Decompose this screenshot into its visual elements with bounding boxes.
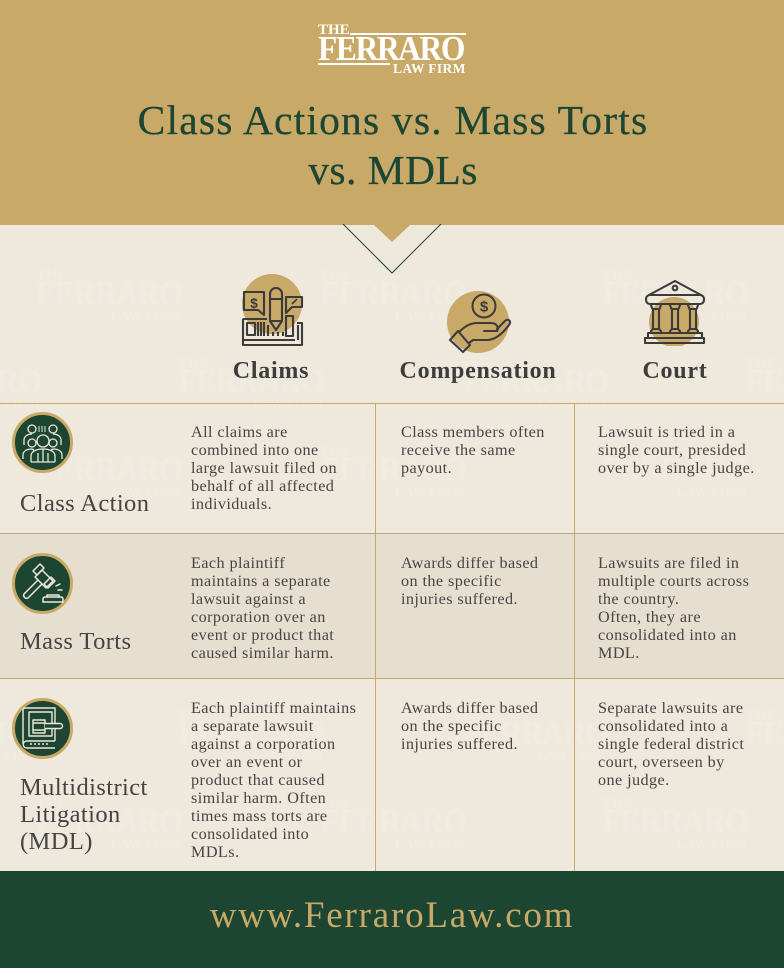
background watermark logos: LAW FIRM: [677, 484, 747, 499]
header band: [0, 0, 784, 225]
icon: compensation: [447, 291, 512, 354]
icon: class action group: [12, 412, 73, 473]
text: MDL claims: similar harm. Often: [191, 789, 326, 807]
background watermark logos: THE: [745, 354, 777, 370]
text: MDL claims: Each plaintiff maintains: [191, 699, 356, 717]
text: class action compensation: Class members often: [401, 423, 545, 441]
text: mass torts court: [598, 554, 749, 662]
text: MDL court: court, overseen by: [598, 753, 725, 771]
label: Multidistrict Litigation (MDL): [20, 774, 148, 855]
icon: compensation: $: [480, 298, 489, 316]
logo: FERRARO: [318, 29, 464, 68]
text: class action court: [598, 423, 755, 477]
title: Class Actions vs. Mass Torts: [138, 97, 648, 143]
background watermark logos: FERRARO: [36, 450, 182, 489]
text: mass torts claims: corporation over an: [191, 608, 326, 626]
text: MDL compensation: on the specific: [401, 717, 502, 735]
background watermark logos: LAW FIRM: [253, 748, 323, 763]
text: mass torts claims: maintains a separate: [191, 572, 331, 590]
title: [138, 97, 648, 193]
background watermark logos: FERRARO: [36, 802, 182, 841]
heading: Court: Court: [642, 358, 708, 384]
background watermark logos: LAW FIRM: [253, 396, 323, 411]
background watermark logos: LAW FIRM: [537, 748, 607, 763]
background watermark logos: THE: [320, 442, 352, 458]
text: class action claims: combined into one: [191, 441, 319, 459]
logo: THE: [318, 22, 350, 38]
text: mass torts court: Often, they are: [598, 608, 701, 626]
text: MDL claims: [191, 699, 356, 861]
text: MDL compensation: injuries suffered.: [401, 735, 518, 753]
background watermark logos: THE: [178, 354, 210, 370]
background watermark logos: FERRARO: [320, 802, 466, 841]
logo: LAW FIRM: [393, 61, 466, 76]
text: MDL claims: a separate lawsuit: [191, 717, 314, 735]
text: mass torts compensation: [401, 554, 538, 608]
text: mass torts compensation: Awards differ based: [401, 554, 538, 572]
background watermark logos: FERRARO: [462, 714, 608, 753]
text: class action claims: [191, 423, 337, 513]
text: MDL claims: times mass torts are: [191, 807, 328, 825]
heading: Claims: Claims: [233, 358, 309, 384]
text: class action compensation: [401, 423, 545, 477]
text: class action court: over by a single judge.: [598, 459, 755, 477]
text: class action claims: All claims are: [191, 423, 288, 441]
background watermark logos: FERRARO: [602, 802, 748, 841]
row: Mass Torts background: [0, 533, 784, 678]
background watermark logos: FERRARO: [36, 274, 182, 313]
text: MDL court: consolidated into a: [598, 717, 728, 735]
text: class action claims: individuals.: [191, 495, 272, 513]
text: mass torts court: the country.: [598, 590, 679, 608]
icon: law book: [12, 698, 73, 759]
title: vs. MDLs: [308, 147, 478, 193]
background watermark logos: THE: [36, 794, 68, 810]
text: MDL court: [598, 699, 744, 789]
icon: gavel: [12, 553, 73, 614]
heading: Compensation: Compensation: [399, 358, 557, 384]
footer: [0, 871, 784, 968]
background watermark logos: THE: [462, 354, 494, 370]
header pointer: [342, 224, 442, 274]
text: MDL claims: over an event or: [191, 753, 302, 771]
label: Mass Torts: Mass Torts: [20, 628, 131, 655]
text: mass torts claims: Each plaintiff: [191, 554, 285, 572]
text: mass torts court: consolidated into an: [598, 626, 737, 644]
icon: claims: $: [250, 296, 258, 311]
background watermark logos: LAW FIRM: [111, 308, 181, 323]
background watermark logos: FERRARO: [178, 714, 324, 753]
text: MDL court: Separate lawsuits are: [598, 699, 743, 717]
label: Multidistrict Litigation (MDL): (MDL): [20, 828, 93, 855]
background watermark logos: THE: [462, 706, 494, 722]
background watermark logos: LAW FIRM: [537, 396, 607, 411]
background watermark logos: LAW FIRM: [677, 308, 747, 323]
background watermark logos: THE: [36, 442, 68, 458]
text: MDL claims: against a corporation: [191, 735, 336, 753]
text: MDL compensation: [401, 699, 538, 753]
footer url: www.FerraroLaw.com: [210, 895, 574, 936]
background watermark logos: LAW FIRM: [395, 308, 465, 323]
text: mass torts compensation: injuries suffered.: [401, 590, 518, 608]
background watermark logos: THE: [745, 706, 777, 722]
background watermark logos: THE: [602, 794, 634, 810]
text: mass torts claims: caused similar harm.: [191, 644, 334, 662]
icon: claims: [242, 274, 304, 346]
background watermark logos: FERRARO: [602, 274, 748, 313]
background watermark logos: LAW FIRM: [111, 484, 181, 499]
text: class action court: single court, presided: [598, 441, 746, 459]
text: MDL claims: consolidated into: [191, 825, 309, 843]
background watermark logos: THE: [36, 266, 68, 282]
text: MDL claims: product that caused: [191, 771, 325, 789]
background watermark logos: THE: [320, 266, 352, 282]
background watermark logos: LAW FIRM: [111, 836, 181, 851]
text: class action claims: large lawsuit filed on: [191, 459, 337, 477]
background watermark logos: LAW FIRM: [395, 484, 465, 499]
text: mass torts claims: event or product that: [191, 626, 334, 644]
background watermark logos: THE: [178, 706, 210, 722]
text: mass torts court: Lawsuits are filed in: [598, 554, 739, 572]
background watermark logos: LAW FIRM: [677, 836, 747, 851]
text: mass torts court: MDL.: [598, 644, 640, 662]
text: class action court: Lawsuit is tried in a: [598, 423, 735, 441]
text: MDL claims: MDLs.: [191, 843, 239, 861]
label: Multidistrict Litigation (MDL): Multidistrict: [20, 774, 148, 801]
text: mass torts compensation: on the specific: [401, 572, 502, 590]
background watermark logos: FERRARO: [602, 450, 748, 489]
background watermark logos: FERRARO: [462, 362, 608, 401]
text: mass torts claims: [191, 554, 334, 662]
background watermark logos: THE: [320, 794, 352, 810]
background watermark logos: FERRARO: [320, 274, 466, 313]
text: MDL compensation: Awards differ based: [401, 699, 538, 717]
label: Multidistrict Litigation (MDL): Litigation: [20, 801, 121, 828]
label: Class Action: Class Action: [20, 490, 149, 517]
icon: court: [644, 280, 706, 346]
text: class action claims: behalf of all affected: [191, 477, 334, 495]
background watermark logos: LAW FIRM: [395, 836, 465, 851]
text: MDL court: single federal district: [598, 735, 744, 753]
text: mass torts court: multiple courts across: [598, 572, 749, 590]
background watermark logos: FERRARO: [178, 362, 324, 401]
text: class action compensation: receive the same: [401, 441, 516, 459]
text: class action compensation: payout.: [401, 459, 452, 477]
background watermark logos: FERRARO: [320, 450, 466, 489]
text: mass torts claims: lawsuit against a: [191, 590, 306, 608]
text: MDL court: one judge.: [598, 771, 670, 789]
background watermark logos: THE: [602, 266, 634, 282]
background watermark logos: [0, 225, 784, 871]
background watermark logos: THE: [602, 442, 634, 458]
